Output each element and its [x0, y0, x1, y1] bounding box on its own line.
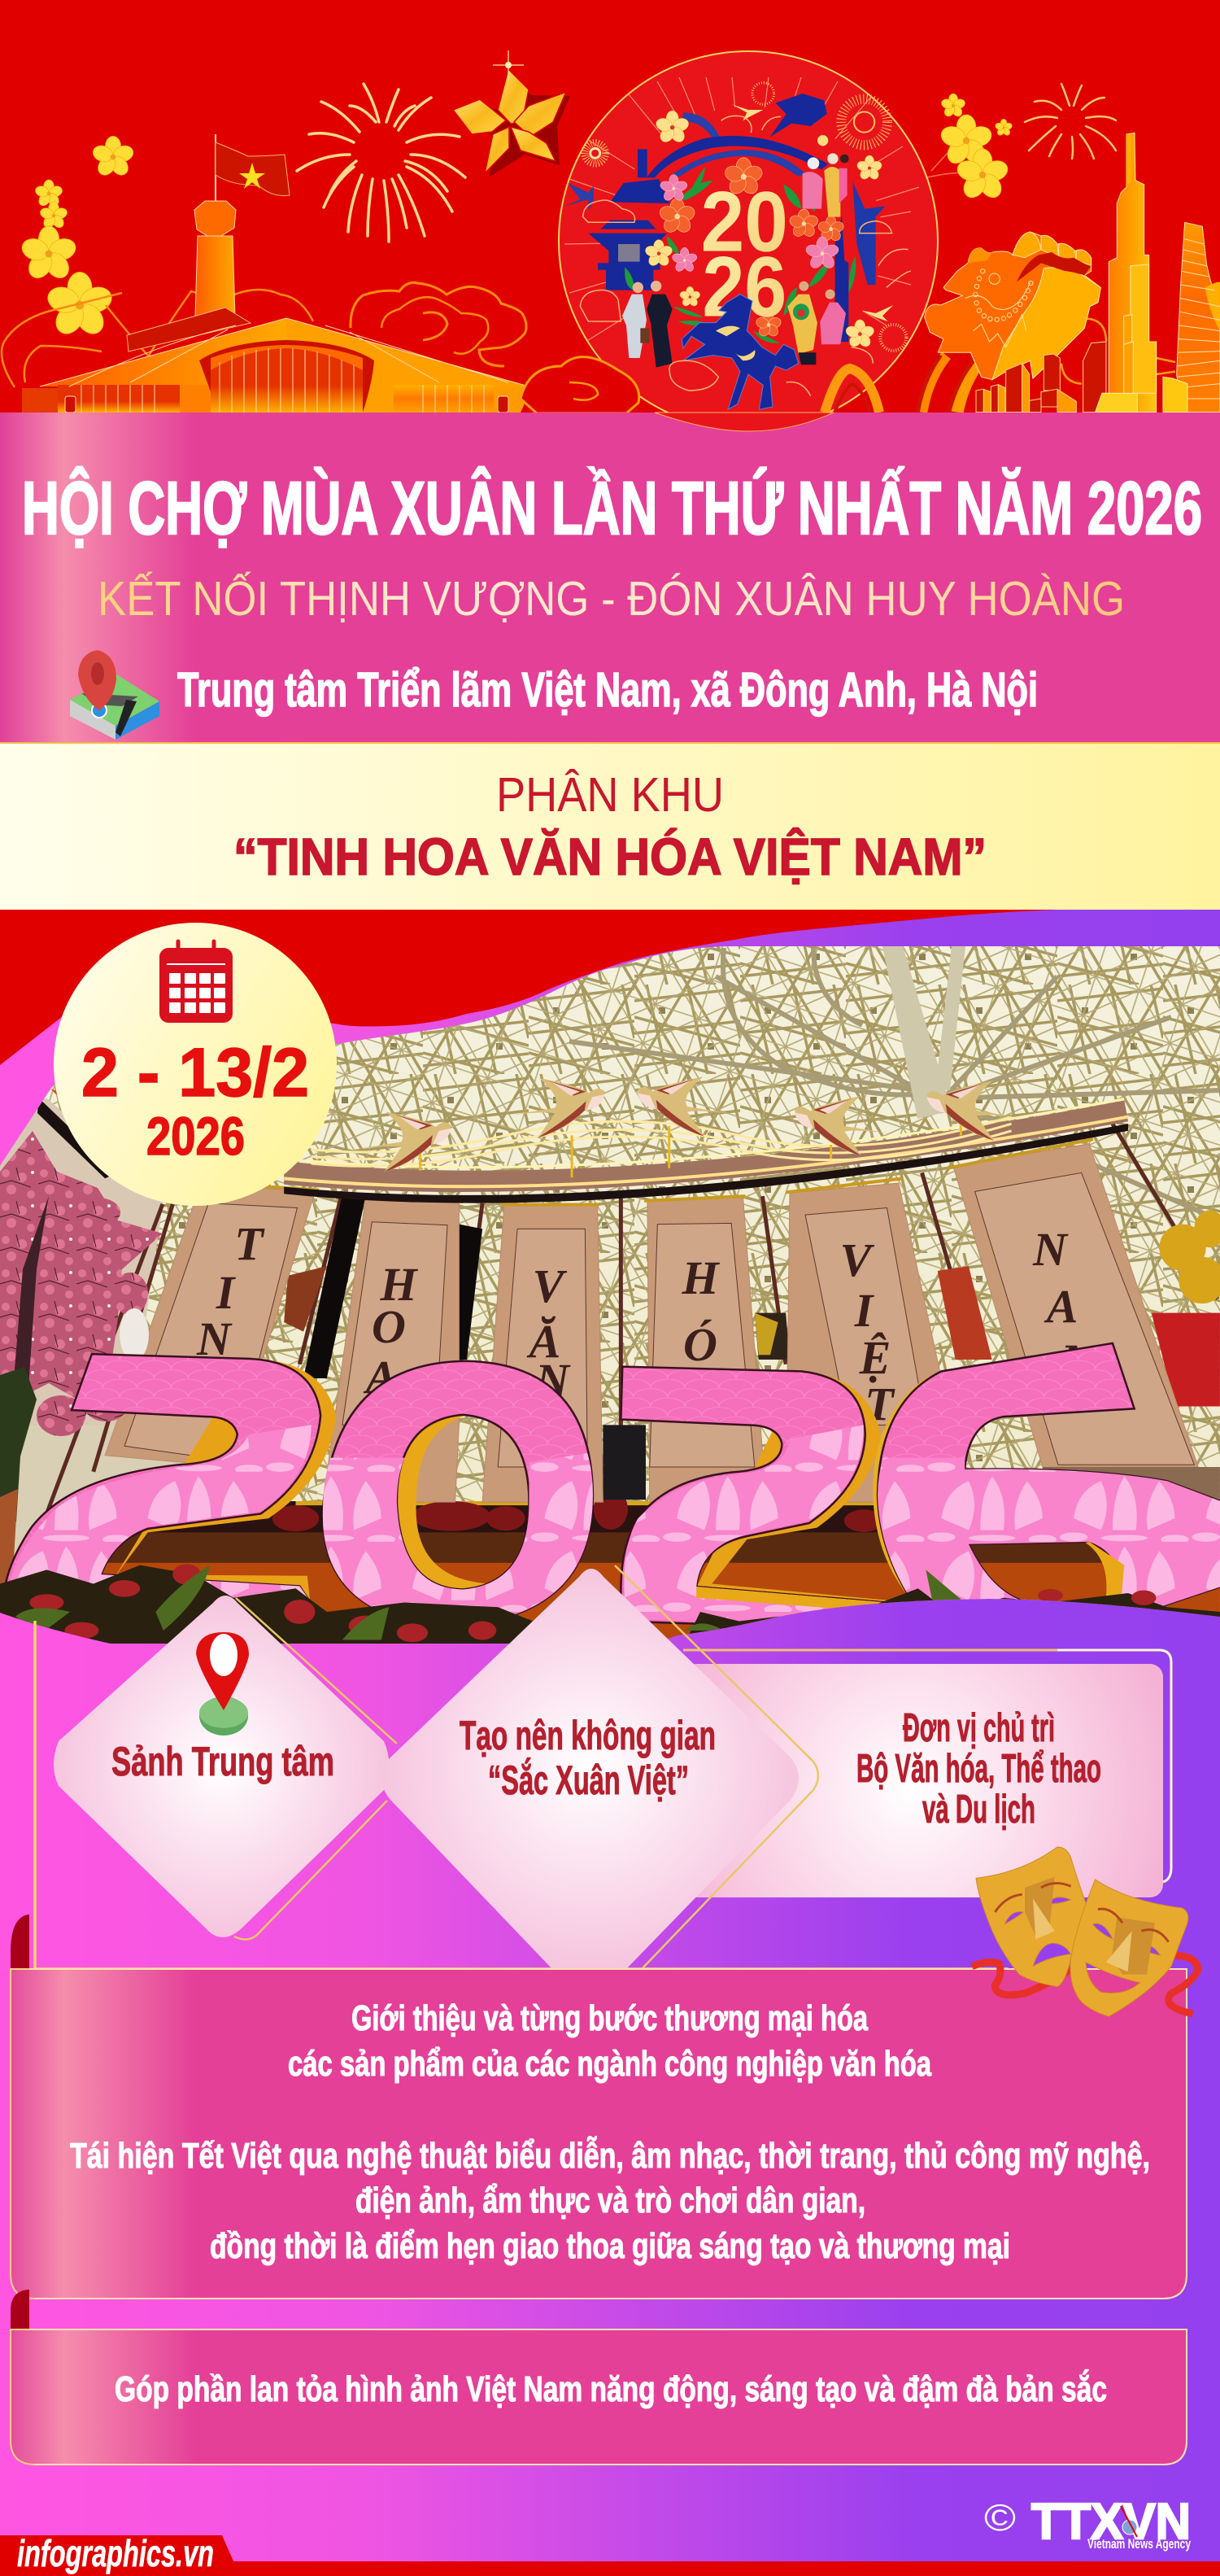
- date circle: [54, 923, 337, 1206]
- calligraphy letters: I: [216, 1266, 237, 1319]
- agency mark: TTXVN: [1031, 2494, 1191, 2550]
- globe on agency mark: [1121, 2506, 1137, 2537]
- zone panel: [0, 742, 1220, 910]
- organizer panel: [683, 1650, 1171, 1897]
- calligraphy letters: N: [1032, 1223, 1069, 1276]
- fireworks right: [1025, 84, 1116, 159]
- wreath flowers: [644, 111, 883, 349]
- cherry tree: [0, 1131, 163, 1436]
- bottom wall: [14, 1458, 185, 1556]
- calligraphy letters: O: [372, 1300, 406, 1353]
- zone name: “TINH HOA VĂN HÓA VIỆT NAM”: [233, 827, 987, 886]
- space text: [460, 1713, 716, 1803]
- curved beam: [284, 1099, 1128, 1203]
- organizer text: [856, 1706, 1101, 1832]
- year 2026: [701, 174, 788, 334]
- digit 2 second rim: [685, 1371, 887, 1626]
- organizer text: Đơn vị chủ trì: [903, 1706, 1055, 1750]
- space text: “Sắc Xuân Việt”: [488, 1757, 689, 1803]
- lion dance head: [925, 232, 1100, 380]
- scroll rods: [194, 1139, 1093, 1204]
- front clouds: [521, 357, 639, 413]
- wall left: [0, 1098, 163, 1426]
- digit 2 gold rim: [94, 1359, 336, 1612]
- diamond: venue: [54, 1596, 389, 1937]
- exhibition hall: [22, 318, 532, 413]
- year: 2026: [146, 1106, 245, 1166]
- logo star: [453, 50, 570, 177]
- icon: map pin: [70, 650, 159, 740]
- flag: [216, 134, 290, 201]
- digit 0: [323, 1361, 593, 1626]
- calligraphy letters: A: [364, 1351, 397, 1404]
- calligraphy letters: M: [1060, 1334, 1105, 1387]
- digit 6 rim: [873, 1371, 941, 1612]
- footer bar: [0, 2532, 1220, 2576]
- calligraphy letters: Ă: [527, 1315, 560, 1368]
- left diamond outline: [234, 1598, 397, 1940]
- yellow blossoms right: [927, 94, 1013, 202]
- subtitle: KẾT NỐI THỊNH VƯỢNG - ĐÓN XUÂN HUY HOÀNG: [98, 572, 1125, 626]
- green shrub left: [0, 1367, 37, 1538]
- ceiling lattice: [0, 944, 1220, 1627]
- calligraphy letters: H: [681, 1251, 720, 1304]
- circle rays: [564, 77, 919, 342]
- dark structures: [303, 1194, 366, 1378]
- calligraphy letters: I: [854, 1284, 875, 1337]
- wreath leaves: [625, 167, 856, 343]
- people top: [803, 153, 849, 217]
- tall tower: [1096, 133, 1157, 413]
- footer logo: [984, 2494, 1191, 2552]
- calligraphy letters: Ó: [683, 1318, 717, 1371]
- icon: location pin: [196, 1632, 249, 1736]
- diamond: space: [381, 1569, 799, 1969]
- big circle emblem: [521, 51, 938, 430]
- digit 0 gold rim: [393, 1413, 490, 1591]
- scroll inner frames: [124, 1172, 1194, 1467]
- fireworks left: [297, 84, 465, 242]
- icon: calendar: [159, 941, 233, 1023]
- calligraphy letters: T: [865, 1378, 895, 1430]
- circle bottom overlap: [655, 413, 834, 431]
- header red background: [0, 0, 1220, 415]
- space text: Tạo nên không gian: [460, 1713, 716, 1758]
- calligraphy letters: H: [379, 1258, 418, 1311]
- calligraphy letters: N: [196, 1312, 233, 1365]
- happy mask: [1070, 1880, 1188, 2016]
- small clouds: [580, 116, 911, 396]
- small buildings: [976, 342, 1106, 413]
- people bottom right: [787, 282, 846, 365]
- memorial tower: [127, 201, 251, 351]
- frame gold line left: [35, 1621, 1009, 1969]
- calligraphy letters: Ệ: [859, 1331, 891, 1384]
- lights: [312, 1117, 1012, 1166]
- stage backdrop: [0, 1425, 1220, 1644]
- yellow blossoms left: [19, 136, 135, 339]
- organizer text: và Du lịch: [922, 1788, 1035, 1832]
- introduction text: điện ảnh, ẩm thực và trò chơi dân gian,: [355, 2181, 865, 2220]
- calligraphy letters: V: [533, 1260, 568, 1312]
- gold under 6 hole: [1085, 1542, 1124, 1607]
- calligraphy letters: A: [1044, 1280, 1078, 1333]
- introduction text: [70, 1998, 1150, 2266]
- digit 2 first: [3, 1354, 323, 1621]
- copyright mark: ©: [984, 2496, 1016, 2539]
- clouds: [2, 282, 526, 387]
- calligraphy letters: T: [234, 1217, 265, 1270]
- site name: infographics.vn: [17, 2532, 214, 2574]
- title panel: [0, 413, 1220, 743]
- venue text: Sảnh Trung tâm: [111, 1739, 334, 1784]
- mid diamond outline: [615, 1565, 818, 1969]
- right screen: [755, 1210, 1220, 1406]
- year 2026: 20: [701, 174, 788, 269]
- calligraphy letters: [196, 1217, 1105, 1430]
- introduction text: các sản phẩm của các ngành công nghiệp văn hóa: [288, 2044, 931, 2084]
- date range: 2 - 13/2: [81, 1034, 309, 1111]
- panel: conclusion: [11, 2290, 1187, 2465]
- calligraphy letters: V: [840, 1233, 875, 1286]
- year 2026: 26: [702, 239, 786, 334]
- header illustration: city skyline and festive art: [2, 50, 1220, 430]
- scroll banners: [105, 1144, 1198, 1502]
- rainbow arch: [825, 369, 879, 413]
- bitexco tower: [1177, 222, 1220, 413]
- blue landmarks: [588, 94, 885, 342]
- digit 2 second: [621, 1367, 895, 1631]
- introduction text: Giới thiệu và từng bước thương mại hóa: [351, 1998, 868, 2038]
- birds: [565, 104, 893, 321]
- sad mask: [976, 1847, 1087, 1987]
- red wave: [0, 910, 1057, 1065]
- anthurium flower bed: [0, 1564, 1220, 1644]
- sunbursts: [585, 83, 906, 351]
- digit 6: [878, 1343, 1220, 1631]
- calligraphy letters: N: [534, 1354, 571, 1407]
- dark behind bottom right: [1043, 1467, 1220, 1500]
- city skyline right: [917, 133, 1220, 413]
- poles: [46, 1124, 1218, 1518]
- lion legs: [917, 356, 982, 413]
- icon: theatre masks: [972, 1847, 1198, 2016]
- zone label: PHÂN KHU: [496, 768, 724, 822]
- horse: [682, 295, 799, 409]
- ribbon: [972, 1955, 1198, 2014]
- people bottom left: [622, 281, 673, 368]
- photo: 2026 installation with calligraphy scrolls: [0, 944, 1220, 1644]
- panel: introduction: [11, 1915, 1187, 2299]
- birds: [351, 1076, 1026, 1172]
